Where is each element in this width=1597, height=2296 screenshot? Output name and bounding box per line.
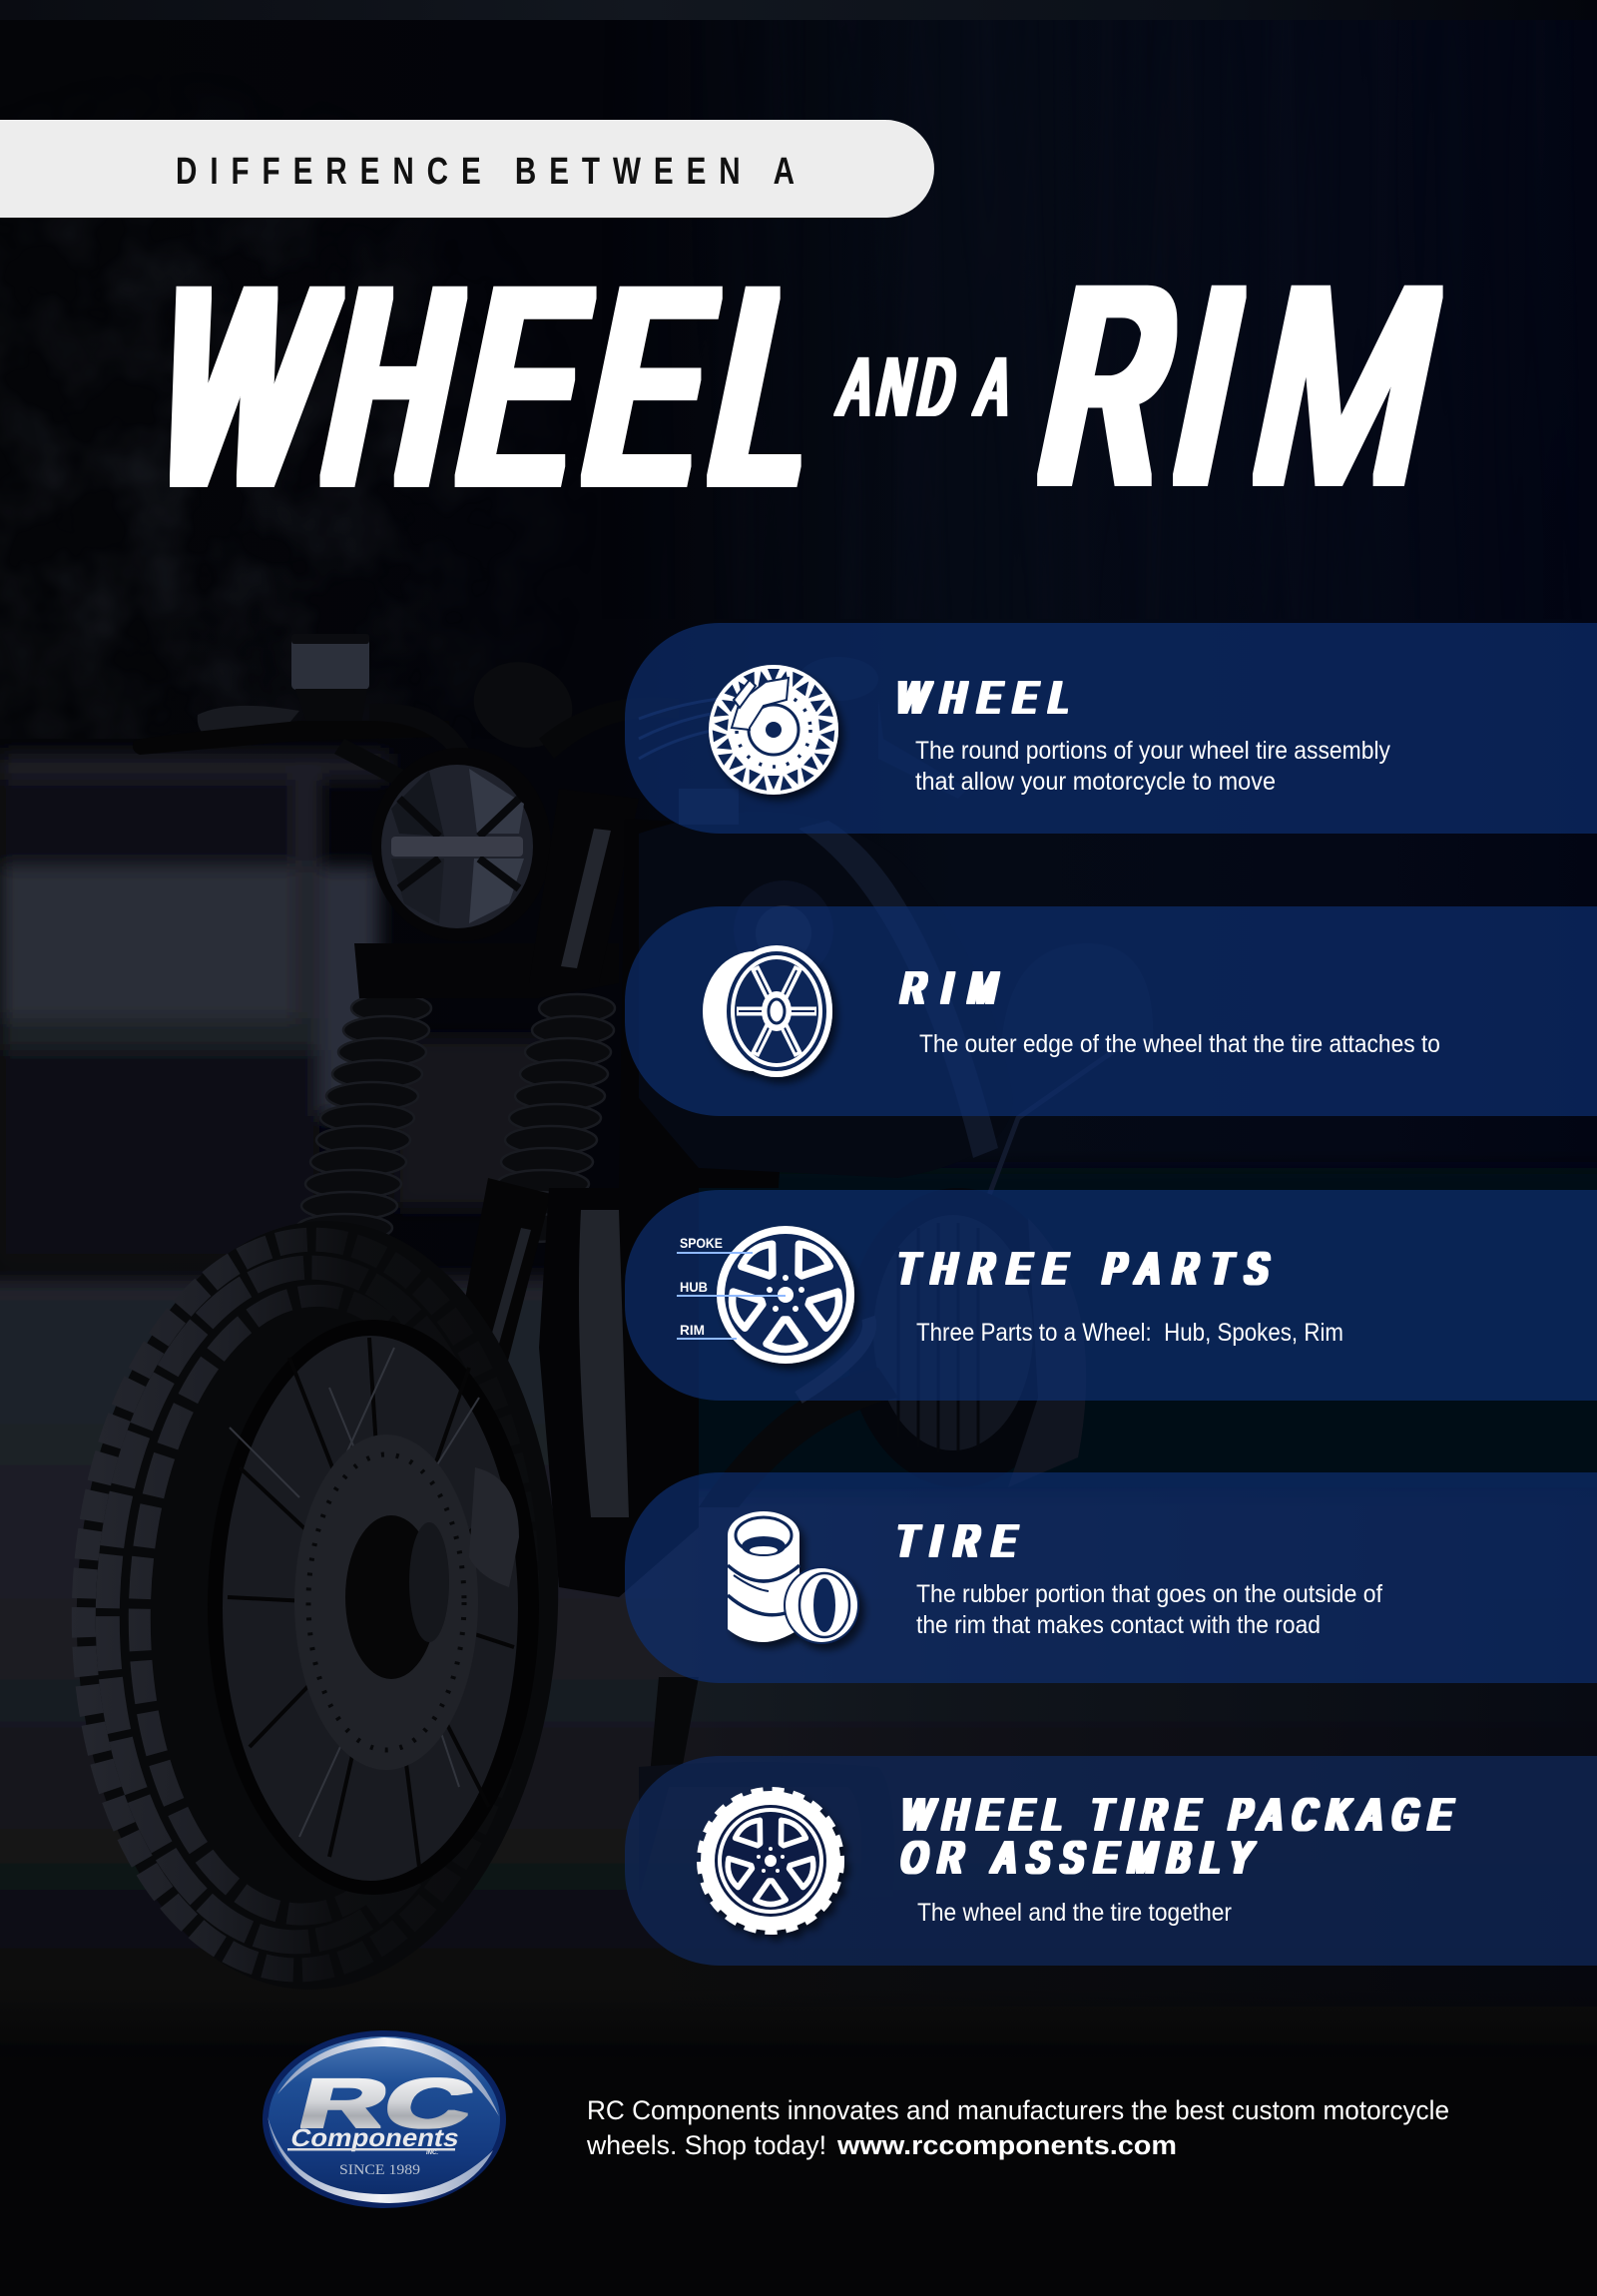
icon: brake wheel: [709, 665, 838, 795]
logo stripes: [287, 2148, 455, 2150]
heading: wheel tire package or assembly: WHEEL TIRE PACKAGE: [897, 1790, 1456, 1840]
footer text: wheels. Shop today!: [586, 2130, 826, 2160]
motorcycle tank, seat and engine: [639, 657, 1153, 1897]
description: tire: The rubber portion that goes on the outside of: [916, 1580, 1382, 1608]
logo since 1989: SINCE 1989: [339, 2162, 420, 2178]
description: wheel: [915, 737, 1390, 796]
footer text: RC Components innovates and manufacturers the best custom motorcycle: [587, 2095, 1449, 2125]
panel: rim: [625, 906, 1597, 1116]
heading: three parts: THREE PARTS: [893, 1244, 1273, 1294]
footer link: www.rccomponents.com: [836, 2130, 1177, 2160]
heading: wheel tire package or assembly: [897, 1790, 1456, 1883]
description: tire: the rim that makes contact with the road: [916, 1611, 1321, 1639]
icon: labelled wheel parts: [677, 1226, 854, 1364]
label: hub: HUB: [680, 1279, 708, 1295]
footer text: [586, 2095, 1449, 2160]
heading: wheel: WHEEL: [892, 673, 1074, 723]
panel: tire: [625, 1472, 1597, 1683]
description: wheel: The round portions of your wheel tire assembly: [915, 737, 1390, 765]
icon: rim: [703, 945, 832, 1077]
motorcycle headlight: [371, 748, 551, 941]
heading: tire: TIRE: [892, 1516, 1020, 1566]
panel: three parts: [625, 1190, 1597, 1401]
heading: wheel tire package or assembly: OR ASSEMBLY: [897, 1833, 1257, 1883]
title word: RIM: [1022, 233, 1465, 539]
icon: tire stack: [728, 1511, 859, 1644]
logo INC: INC.: [426, 2150, 438, 2156]
main title: wheel and a rim: [135, 233, 1465, 540]
title words: AND A: AND A: [832, 341, 1020, 433]
description: wheel: that allow your motorcycle to move: [915, 768, 1276, 796]
description: package: The wheel and the tire together: [917, 1899, 1232, 1927]
description: three parts: Three Parts to a Wheel: Hub, Spokes, Rim: [916, 1319, 1343, 1347]
label: rim: [677, 1322, 737, 1340]
label: spoke: SPOKE: [680, 1235, 723, 1251]
title word: WHEEL: WHEEL: [135, 234, 843, 540]
motorcycle front wheel: [64, 1213, 571, 1998]
title pill: difference between a: [0, 120, 934, 218]
title word: RIM: RI: [1022, 233, 1283, 539]
description: rim: The outer edge of the wheel that the tire attaches to: [919, 1030, 1440, 1058]
label: rim: RIM: [680, 1322, 705, 1338]
panel: wheel tire package: [625, 1756, 1597, 1966]
logo: RC Components: [263, 2030, 506, 2208]
motorcycle forks and boots: [296, 789, 798, 1597]
panel: wheel: [625, 623, 1597, 834]
description: tire: [916, 1580, 1382, 1639]
logo lettering RC: RC: [291, 2065, 480, 2143]
pill label text: DIFFERENCE BETWEEN A: [176, 151, 795, 193]
motorcycle handlebar and reservoir: [133, 634, 679, 814]
label: spoke: [677, 1235, 753, 1254]
logo lettering Components: Components: [288, 2124, 462, 2152]
title word: RIM: M: [1231, 233, 1465, 539]
heading: rim: RIM: [897, 963, 1002, 1013]
icon: wheel with tire: [700, 1790, 841, 1932]
label: hub: [677, 1279, 786, 1297]
